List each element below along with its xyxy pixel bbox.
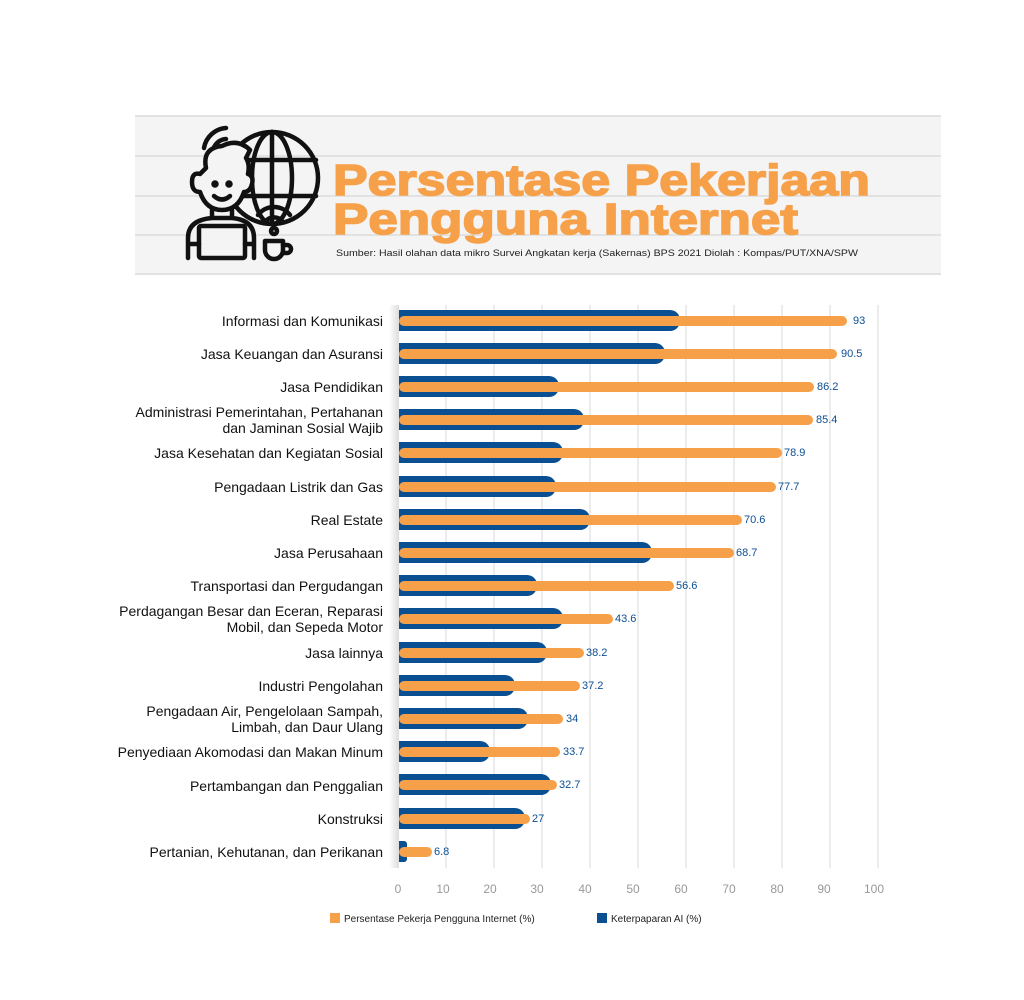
category labels: Pertambangan dan Penggalian <box>190 778 383 794</box>
legend: Keterpaparan AI (%) <box>611 914 702 925</box>
category labels: Perdagangan Besar dan Eceran, Reparasi <box>119 603 383 619</box>
x axis labels: 70 <box>722 882 736 896</box>
category labels: Pertanian, Kehutanan, dan Perikanan <box>149 844 383 860</box>
x axis labels: 40 <box>578 882 592 896</box>
legend <box>330 913 702 925</box>
bar chart <box>399 310 865 862</box>
gridlines <box>446 305 878 868</box>
x axis labels: 80 <box>770 882 784 896</box>
x axis labels: 0 <box>395 882 402 896</box>
bar chart: 85.4 <box>816 414 837 426</box>
bar chart: 33.7 <box>563 746 584 758</box>
category labels: Pengadaan Air, Pengelolaan Sampah, <box>146 703 383 719</box>
bar chart: 6.8 <box>434 846 449 858</box>
x axis labels: 30 <box>530 882 544 896</box>
bar chart: 93 <box>853 315 865 327</box>
category labels <box>118 313 383 860</box>
category labels: Transportasi dan Pergudangan <box>190 578 383 594</box>
category labels: Jasa Kesehatan dan Kegiatan Sosial <box>154 445 383 461</box>
title: Persentase Pekerjaan <box>333 156 870 205</box>
category labels: Penyediaan Akomodasi dan Makan Minum <box>118 744 383 760</box>
bar chart: 27 <box>532 813 544 825</box>
bar chart: 70.6 <box>744 514 765 526</box>
category labels: Limbah, dan Daur Ulang <box>231 719 383 735</box>
x axis labels: 60 <box>674 882 688 896</box>
icon: person with laptop and globe <box>188 128 318 259</box>
category labels: Jasa Pendidikan <box>280 379 383 395</box>
category labels: Konstruksi <box>318 811 383 827</box>
bar chart: 32.7 <box>559 779 580 791</box>
header band <box>135 115 941 275</box>
x axis labels: 20 <box>483 882 497 896</box>
title: Pengguna Internet <box>333 195 798 244</box>
bar chart: 77.7 <box>778 481 799 493</box>
y axis <box>389 305 399 868</box>
category labels: Jasa Keuangan dan Asuransi <box>201 346 383 362</box>
category labels: dan Jaminan Sosial Wajib <box>222 420 383 436</box>
x axis labels <box>395 882 884 896</box>
category labels: Industri Pengolahan <box>258 678 383 694</box>
bar chart: 38.2 <box>586 647 607 659</box>
category labels: Mobil, dan Sepeda Motor <box>227 619 383 635</box>
legend: Persentase Pekerja Pengguna Internet (%) <box>344 914 535 925</box>
bar chart: 37.2 <box>582 680 603 692</box>
source text: Sumber: Hasil olahan data mikro Survei Angkatan kerja (Sakernas) BPS 2021 Diolah : Kompas/PUT/XNA/SPW <box>336 248 858 259</box>
x axis labels: 100 <box>864 882 884 896</box>
category labels: Jasa lainnya <box>305 645 383 661</box>
bar chart: 90.5 <box>841 348 862 360</box>
title <box>333 156 870 244</box>
x axis labels: 50 <box>626 882 640 896</box>
category labels: Jasa Perusahaan <box>274 545 383 561</box>
bar chart: 78.9 <box>784 447 805 459</box>
category labels: Pengadaan Listrik dan Gas <box>214 479 383 495</box>
bar chart: 56.6 <box>676 580 697 592</box>
bar chart: 86.2 <box>817 381 838 393</box>
bar chart: 34 <box>566 713 578 725</box>
x axis labels: 10 <box>436 882 450 896</box>
category labels: Informasi dan Komunikasi <box>222 313 383 329</box>
category labels: Administrasi Pemerintahan, Pertahanan <box>136 404 383 420</box>
x axis labels: 90 <box>817 882 831 896</box>
bar chart: 68.7 <box>736 547 757 559</box>
category labels: Real Estate <box>311 512 383 528</box>
bar chart: 43.6 <box>615 613 636 625</box>
